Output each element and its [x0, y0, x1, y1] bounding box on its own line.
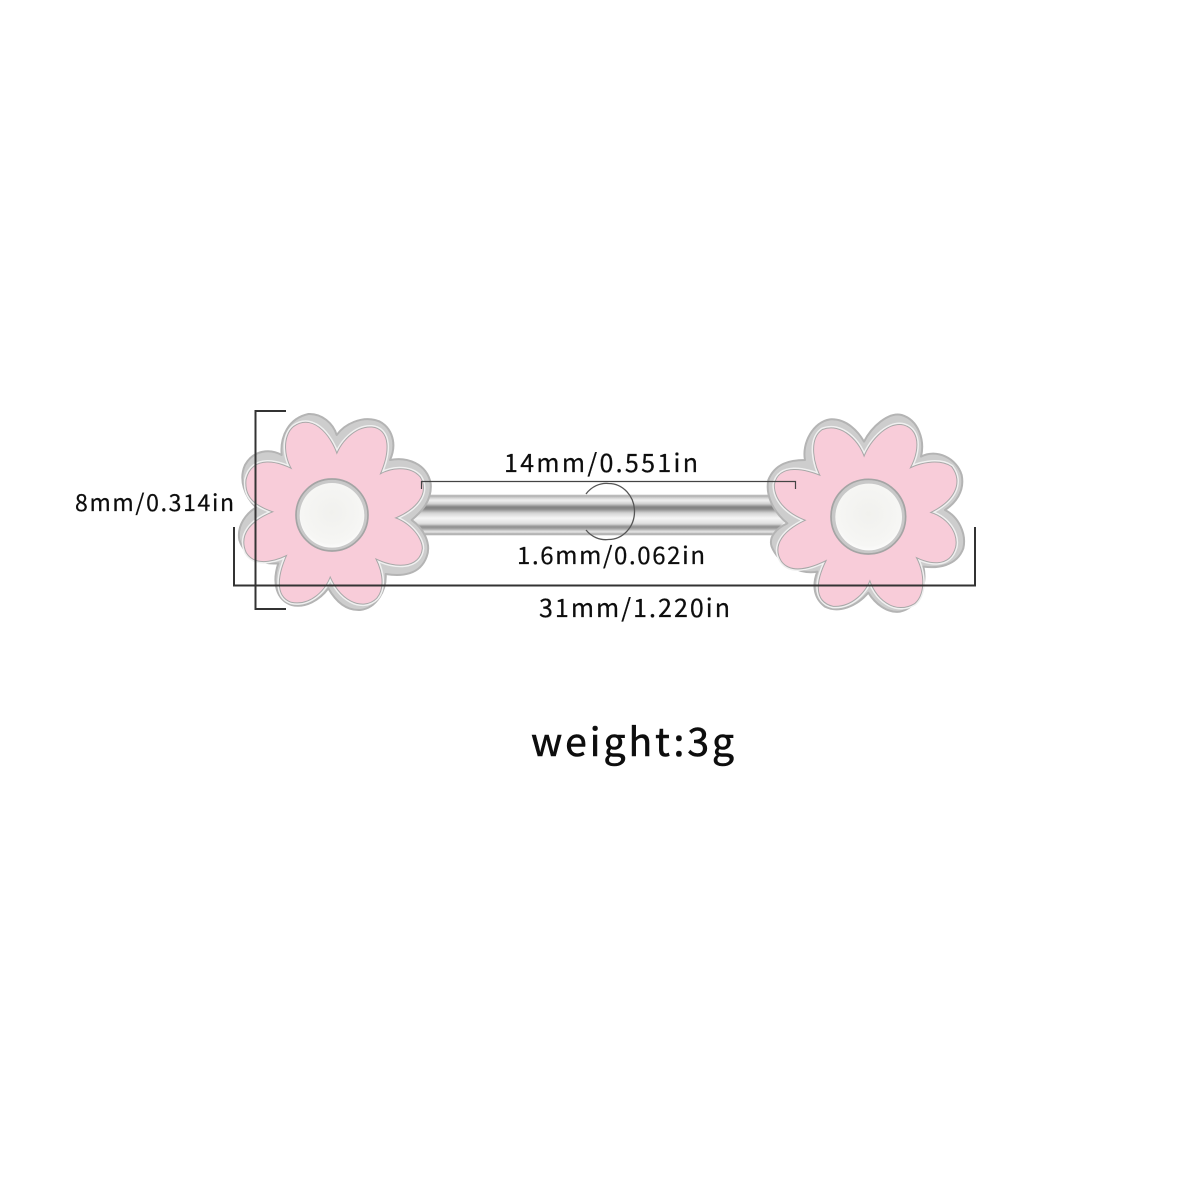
dimension: 1.6mm gauge circle: [586, 483, 634, 540]
dimension: 8mm height bracket: [256, 411, 286, 609]
dimension: 14mm length bracket: [422, 482, 796, 489]
icon: right pink flower: [768, 415, 964, 612]
label: 31mm: 31mm/1.220in: [539, 589, 730, 625]
flower centre: [296, 479, 368, 551]
dimension: 31mm total length bracket: [234, 527, 975, 586]
label: 14mm: 14mm/0.551in: [504, 444, 698, 480]
label: 8mm: 8mm/0.314in: [75, 484, 234, 518]
label: weight: weight:3g: [531, 712, 734, 768]
label: 1.6mm: 1.6mm/0.062in: [517, 536, 705, 571]
flower centre: [831, 479, 906, 554]
icon: left pink flower: [239, 414, 431, 610]
barbell: silver bar: [410, 495, 786, 535]
